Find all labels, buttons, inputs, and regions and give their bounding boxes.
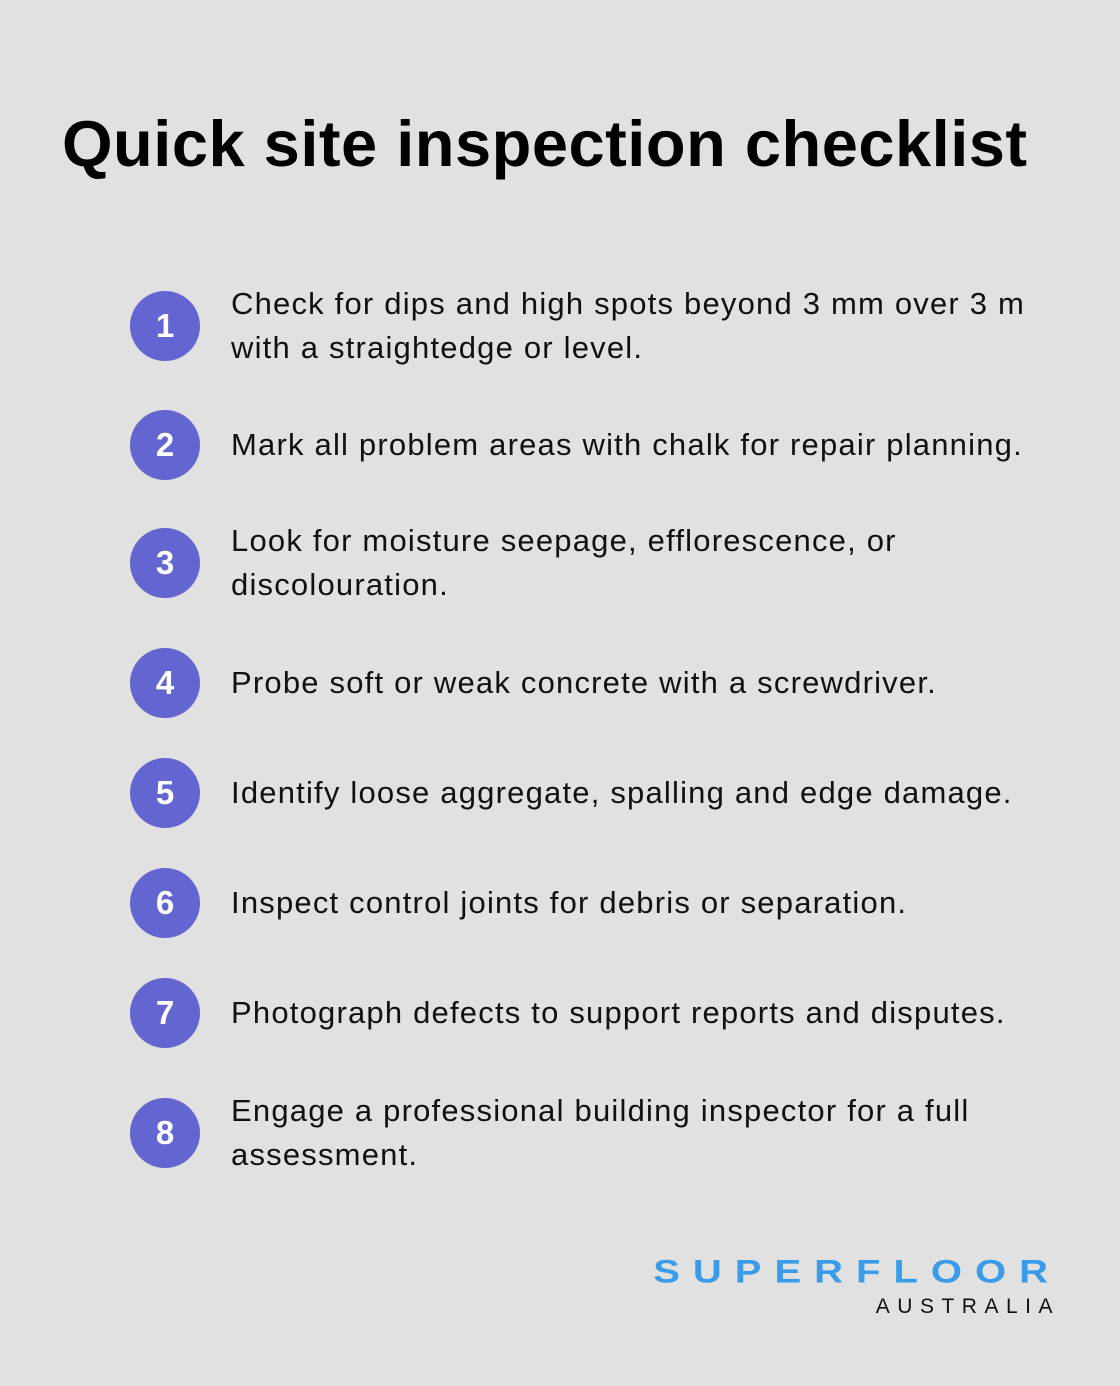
- item 2: 2: [156, 426, 174, 463]
- item 4: 4: [156, 664, 174, 701]
- item 4: [130, 648, 937, 718]
- item 7: Photograph defects to support reports and disputes.: [231, 995, 1006, 1030]
- item 8: Engage a professional building inspector for a full assessment.: [231, 1093, 969, 1172]
- item 7: 7: [156, 994, 174, 1031]
- item 3: Look for moisture seepage, efflorescence, or discolouration.: [231, 523, 897, 602]
- item 1: Check for dips and high spots beyond 3 mm over 3 m with a straightedge or level.: [231, 286, 1025, 365]
- item 8: 8: [156, 1114, 174, 1151]
- item 6: [130, 868, 907, 938]
- item 6: 6: [156, 884, 174, 921]
- logo: SUPERFLOOR: [653, 1254, 1061, 1290]
- item 4: Probe soft or weak concrete with a screwdriver.: [231, 665, 937, 700]
- item 1: 1: [156, 307, 174, 344]
- item 7: [130, 978, 1006, 1048]
- title: Quick site inspection checklist: [62, 107, 1028, 180]
- item 3: 3: [156, 544, 174, 581]
- item 2: [130, 410, 1023, 480]
- item 5: Identify loose aggregate, spalling and edge damage.: [231, 775, 1013, 810]
- item 5: [130, 758, 1013, 828]
- logo: AUSTRALIA: [876, 1295, 1060, 1318]
- item 6: Inspect control joints for debris or separation.: [231, 885, 907, 920]
- item 5: 5: [156, 774, 174, 811]
- logo: [653, 1254, 1061, 1318]
- item 2: Mark all problem areas with chalk for repair planning.: [231, 427, 1023, 462]
